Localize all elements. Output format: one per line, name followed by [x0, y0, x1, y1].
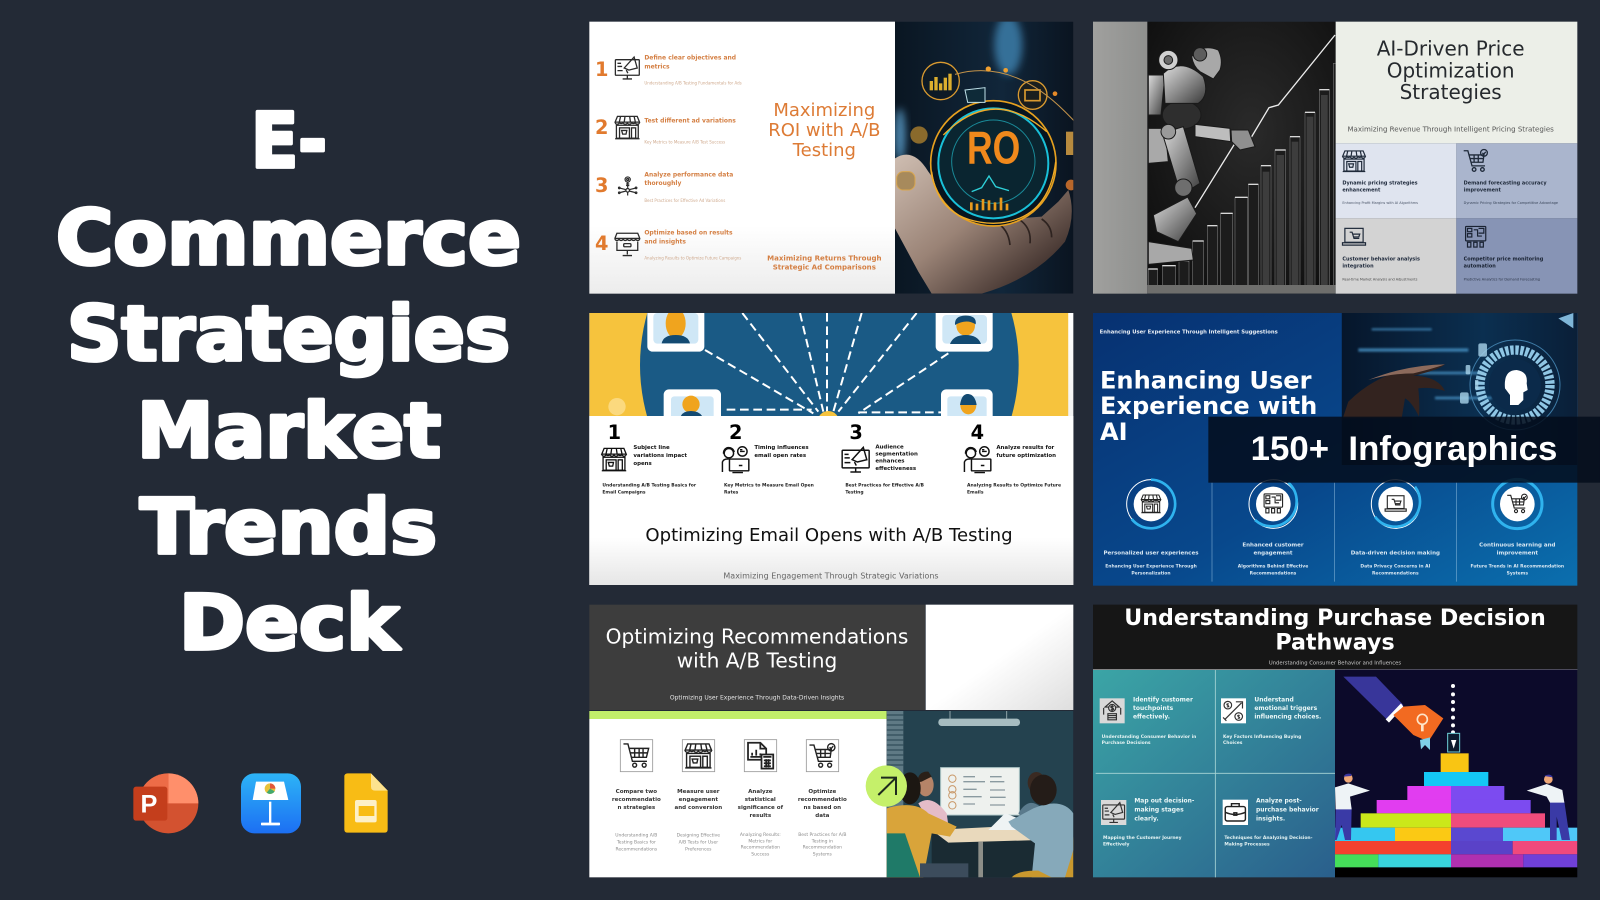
column 1: Recommendations — [615, 847, 658, 853]
step 3: Audience — [875, 444, 904, 450]
slide title: AI — [1100, 418, 1128, 446]
column 4: Best Practices for A/B — [798, 832, 846, 838]
step 2: email open rates — [754, 453, 806, 459]
column 3: results — [750, 813, 772, 819]
cell 4: Techniques for Analyzing Decision- — [1224, 835, 1313, 841]
tile: demand forecasting: Dynamic Pricing Strategies for Competitive Advantage — [1464, 201, 1558, 205]
tile: dynamic pricing — [1336, 143, 1456, 218]
step 1: opens — [633, 461, 652, 467]
step 3 — [842, 421, 924, 496]
cell 4: purchase behavior — [1256, 807, 1319, 814]
slide title: Testing — [792, 140, 856, 161]
cell 2: Choices — [1223, 740, 1243, 746]
column 2: Algorithms Behind Effective — [1238, 563, 1308, 569]
slide title: ROI with A/B — [768, 120, 880, 141]
step 1: 1 — [608, 421, 621, 444]
column 3: statistical — [745, 797, 776, 803]
heading block — [1336, 22, 1577, 143]
title: E-Commerce Strategies Market Trends Deck: Market — [137, 386, 441, 475]
cell 4: Making Processes — [1224, 841, 1270, 847]
step 3: enhances — [875, 459, 905, 465]
step 4: Emails — [967, 490, 984, 496]
column 3 — [738, 740, 784, 857]
step 2 — [722, 421, 814, 496]
step 4: and insights — [644, 238, 686, 245]
cell 2 — [1221, 696, 1321, 746]
column 4: Future Trends in AI Recommendation — [1471, 563, 1564, 569]
heading block: Optimizing Recommendations — [606, 624, 908, 648]
photo: hand touching AI interface — [1342, 313, 1577, 465]
cell 4: insights. — [1256, 815, 1285, 822]
cell 2: Understand — [1254, 696, 1294, 703]
column 4: Systems — [813, 851, 833, 857]
step 3: thoroughly — [644, 180, 681, 187]
heading block: Understanding Purchase Decision — [1124, 605, 1546, 631]
icon: Keynote — [241, 773, 301, 833]
cell 4: Analyze post- — [1256, 798, 1302, 805]
column 3: Data-driven decision making — [1351, 551, 1440, 557]
cell 1: Understanding Consumer Behavior in — [1102, 734, 1196, 740]
column 2: Designing Effective — [677, 833, 720, 839]
panel: Understanding Purchase Decision Pathways — [1093, 605, 1577, 877]
panel: AI-Driven Price Optimization Strategies — [1093, 22, 1577, 294]
tile: competitor monitoring: automation — [1464, 264, 1496, 270]
panel: Optimizing Email Opens with A/B Testing — [589, 313, 1074, 585]
small heading: Enhancing User Experience Through Intelligent Suggestions — [1100, 329, 1278, 335]
column 4: Systems — [1507, 571, 1528, 577]
heading block: AI-Driven Price — [1377, 37, 1525, 61]
tile: customer behavior: Real-time Market Analysis and Adjustments — [1342, 277, 1418, 281]
step 1: Understanding A/B Testing Basics for — [602, 483, 697, 489]
slide subtitle: Maximizing Returns Through — [767, 254, 882, 263]
step 4: 4 — [971, 421, 984, 444]
step 3: segmentation — [875, 452, 918, 458]
step 1: variations impact — [633, 453, 687, 459]
column 3: Recommendation — [741, 845, 780, 851]
column 1: recommendatio — [612, 797, 661, 803]
step 2: Key Metrics to Measure Email Open — [724, 483, 814, 489]
column 4: Optimize — [808, 789, 837, 795]
cell 4 — [1223, 798, 1319, 847]
step 2: 2 — [729, 421, 742, 444]
icon: PowerPoint: P — [141, 790, 158, 818]
column 2: Preferences — [685, 847, 712, 853]
column 4: ns based on — [804, 805, 841, 811]
step 3 — [595, 171, 733, 203]
tile: customer behavior: integration — [1342, 264, 1374, 270]
column 3: Analyzing Results: — [740, 832, 781, 838]
step 2: Key Metrics to Measure A/B Test Success — [644, 140, 725, 145]
step 4: Analyzing Results to Optimize Future — [967, 483, 1061, 489]
title: E-Commerce Strategies Market Trends Deck: E- — [251, 96, 327, 185]
column 2: engagement — [1253, 551, 1293, 557]
heading block: Optimizing User Experience Through Data-Driven Insights — [670, 694, 844, 701]
illustration: colorful pyramid with hand and people — [1335, 669, 1577, 877]
tile: dynamic pricing: Dynamic pricing strategies — [1342, 180, 1418, 186]
heading block — [1093, 605, 1577, 670]
cell 1: touchpoints — [1133, 705, 1174, 712]
column 3: Success — [751, 851, 770, 857]
heading block: Optimization — [1387, 58, 1515, 82]
panel: Optimizing Recommendations with A/B Testing — [589, 605, 1073, 877]
step 4: 4 — [595, 232, 608, 255]
blank white block — [926, 605, 1073, 710]
teal grid background — [1093, 670, 1335, 877]
banner: 150+ Infographics: 150+ Infographics — [1251, 430, 1557, 468]
column 1: Understanding A/B — [615, 833, 657, 839]
icon: Google Slides — [344, 773, 388, 833]
column 2: A/B Tests for User — [679, 840, 718, 846]
photo: robot climbing bar chart — [1147, 22, 1336, 294]
step 1: Subject line — [633, 445, 670, 451]
step 4 — [964, 421, 1061, 496]
tile: demand forecasting — [1456, 143, 1577, 218]
step 4: Optimize based on results — [644, 230, 733, 237]
cell 3 — [1101, 798, 1195, 847]
heading block: Pathways — [1275, 630, 1395, 656]
column 4: data — [815, 813, 830, 819]
column 1: n strategies — [617, 805, 656, 811]
step 1 — [602, 421, 697, 496]
step 3: Best Practices for Effective Ad Variations — [644, 198, 725, 203]
step 4 — [595, 230, 741, 261]
column 2: Measure user — [677, 789, 720, 795]
tile: competitor monitoring — [1456, 218, 1577, 294]
green accent bar — [589, 711, 887, 719]
step 3: 3 — [849, 421, 863, 444]
column 3: Data Privacy Concerns in AI — [1360, 563, 1431, 569]
column 2 — [1238, 480, 1308, 577]
heading block: Maximizing Revenue Through Intelligent Pricing Strategies — [1347, 124, 1554, 133]
cell 2: emotional triggers — [1254, 705, 1318, 712]
step 2: Test different ad variations — [644, 117, 736, 124]
tile: dynamic pricing: Enhancing Profit Margins with AI Algorithms — [1342, 201, 1418, 205]
heading block: with A/B Testing — [677, 649, 837, 673]
title: E-Commerce Strategies Market Trends Deck: Trends — [140, 482, 437, 571]
slide title: Maximizing — [773, 100, 875, 121]
title: E-Commerce Strategies Market Trends Deck: Strategies — [67, 289, 510, 378]
step 3: Testing — [845, 490, 864, 496]
column 3: Recommendations — [1372, 571, 1419, 577]
app icons row — [133, 773, 388, 833]
cell 2: Key Factors Influencing Buying — [1223, 734, 1301, 740]
column 1: Enhancing User Experience Through — [1105, 563, 1197, 569]
tile: demand forecasting: improvement — [1464, 188, 1502, 194]
column dividers — [1212, 483, 1456, 582]
step 1: metrics — [644, 63, 670, 70]
slide subtitle: Strategic Ad Comparisons — [773, 262, 876, 271]
step 2: Rates — [724, 490, 739, 496]
column 4: Continuous learning and — [1479, 543, 1556, 549]
slide title: Enhancing User — [1100, 366, 1312, 394]
slide title: Experience with — [1100, 392, 1317, 420]
tile: competitor monitoring: Competitor price monitoring — [1464, 257, 1544, 263]
heading block: Understanding Consumer Behavior and Influences — [1269, 661, 1401, 667]
column 1: Personalized user experiences — [1104, 551, 1199, 557]
column 1: Personalization — [1131, 571, 1171, 577]
heading block — [589, 605, 925, 710]
step 3: 3 — [595, 174, 608, 197]
column 2: Recommendations — [1250, 571, 1297, 577]
panel background — [589, 313, 1073, 585]
cell 3: clearly. — [1134, 815, 1159, 822]
column 2 — [674, 740, 722, 853]
column 3 — [1351, 480, 1440, 577]
step 3: Analyze performance data — [644, 171, 733, 178]
column 1 — [612, 740, 661, 853]
illustration: network of people — [589, 313, 1068, 416]
column 4: improvement — [1497, 551, 1538, 557]
step 4: Analyze results for — [996, 445, 1055, 451]
step 1: Understanding A/B Testing Fundamentals for Ads — [644, 81, 742, 86]
photo: hand holding ROI orb: RO — [967, 121, 1020, 173]
icon: PowerPoint — [133, 773, 198, 833]
step 2 — [595, 116, 736, 145]
cell 3: making stages — [1134, 807, 1184, 814]
banner: 150+ Infographics — [1208, 417, 1600, 483]
content background — [589, 719, 887, 877]
column 2: and conversion — [674, 805, 722, 811]
column 3: Metrics for — [748, 838, 772, 844]
tile: customer behavior — [1336, 218, 1456, 294]
title: E-Commerce Strategies Market Trends Deck: Commerce — [56, 193, 521, 282]
heading block: Strategies — [1400, 80, 1502, 104]
illustration: team meeting — [887, 711, 1073, 877]
step 4: future optimization — [996, 453, 1056, 459]
cell 3: Map out decision- — [1134, 798, 1195, 805]
slide subtitle: Maximizing Engagement Through Strategic Variations — [723, 571, 939, 580]
step 1: Email Campaigns — [602, 490, 646, 496]
cell 1 — [1100, 696, 1196, 746]
column 1 — [1104, 480, 1199, 577]
step 3: effectiveness — [875, 466, 916, 472]
column 4 — [798, 740, 847, 857]
column 2: engagement — [679, 797, 718, 803]
cell 2: influencing choices. — [1254, 714, 1321, 721]
step 2: Timing influences — [754, 445, 809, 451]
column 4: Testing in — [811, 838, 833, 844]
title: E-Commerce Strategies Market Trends Deck: Deck — [179, 578, 401, 667]
cell 1: Purchase Decisions — [1102, 740, 1151, 746]
arrow badge — [866, 765, 907, 807]
photo: hand holding ROI orb — [895, 22, 1074, 294]
cell 1: Identify customer — [1133, 696, 1193, 703]
panel background — [1093, 313, 1577, 586]
tile: dynamic pricing: enhancement — [1342, 188, 1381, 194]
column 1: Compare two — [616, 789, 657, 795]
tile: demand forecasting: Demand forecasting accuracy — [1464, 180, 1547, 186]
column 4 — [1471, 479, 1564, 577]
panel: Maximizing ROI with A/B Testing — [589, 15, 1094, 294]
cell 3: Mapping the Customer Journey — [1103, 835, 1182, 841]
tile: customer behavior: Customer behavior analysis — [1342, 257, 1420, 263]
step 4: Analyzing Results to Optimize Future Campaigns — [644, 256, 741, 261]
step 1: 1 — [595, 58, 608, 81]
cell 3: Effectively — [1103, 841, 1130, 847]
panel background — [589, 22, 895, 294]
column 3: significance of — [738, 805, 784, 811]
column 2: Enhanced customer — [1242, 543, 1304, 549]
step 1: Define clear objectives and — [644, 55, 736, 62]
step 2: 2 — [595, 116, 608, 139]
cell 1: effectively. — [1133, 714, 1170, 721]
tile: competitor monitoring: Predictive Analytics for Demand Forecasting — [1464, 277, 1540, 281]
step 3: Best Practices for Effective A/B — [845, 483, 924, 489]
column 1: Testing Basics for — [616, 840, 656, 846]
panel: Enhancing User Experience with AI — [1093, 313, 1600, 586]
title: E-Commerce Strategies Market Trends Deck — [56, 96, 521, 667]
column 3: Analyze — [748, 789, 773, 795]
step 1 — [595, 55, 742, 86]
column 4: recommendatio — [798, 797, 847, 803]
column 4: Recommendation — [803, 845, 842, 851]
grey side strip — [1093, 22, 1147, 294]
slide title: Optimizing Email Opens with A/B Testing — [645, 525, 1013, 546]
